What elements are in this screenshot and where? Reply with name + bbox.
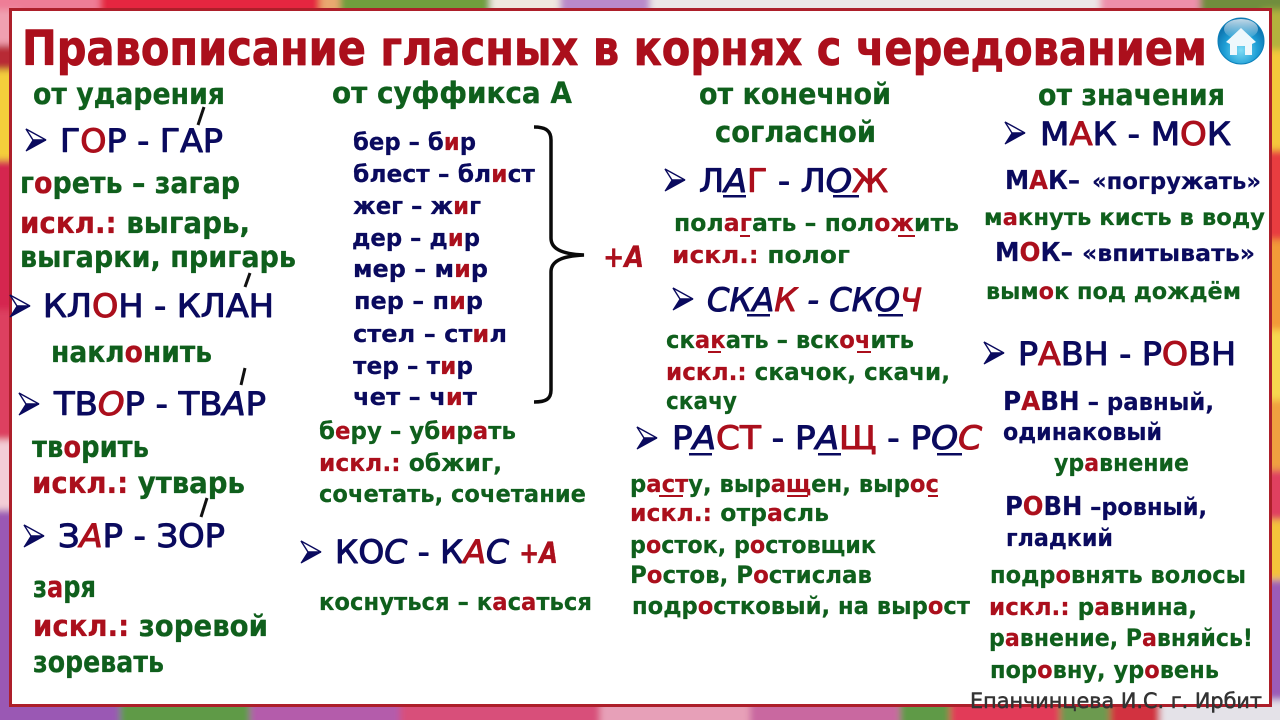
root pair: равн-ровн: РАВН - РОВН [1018, 335, 1236, 373]
exception: утварь: искл.: утварь [32, 466, 245, 500]
icon: bullet arrow [984, 342, 1004, 364]
stress mark [201, 498, 207, 517]
root list: мер – мир [353, 255, 488, 283]
panel: от конечной согласной [630, 77, 983, 620]
example: выгарки, пригарь: выгарки, пригарь [20, 240, 296, 274]
meaning: мак погружать: МАК– [1005, 166, 1080, 196]
example: расту, выращен, вырос: расту, выращен, вырос [630, 470, 939, 498]
example: уравнение: уравнение [1054, 449, 1189, 477]
heading: от конечной согласной: от конечной [699, 77, 891, 111]
example: Ростов, Ростислав: Ростов, Ростислав [630, 561, 872, 589]
root list: чет – чит [353, 383, 477, 411]
root pair: лаг-лож: ЛАГ - ЛОЖ [699, 162, 888, 200]
example: коснуться-касаться: коснуться – касаться [319, 588, 592, 616]
root pair: кос-кас: КОС - КАС [335, 533, 510, 571]
root list: бер – бир [353, 128, 476, 156]
meaning: мок впитывать: «впитывать» [1082, 241, 1255, 267]
root list: пер – пир [354, 287, 483, 315]
icon: bullet arrow [10, 295, 30, 317]
icon: home button [1218, 18, 1264, 64]
exception: выгарь: искл.: выгарь, [20, 206, 250, 240]
icon: bullet arrow [26, 129, 46, 151]
root pair: мак-мок: МАК - МОК [1040, 115, 1231, 153]
example: полагать-положить: полагать – положить [674, 209, 959, 237]
icon: bullet arrow [673, 288, 693, 310]
example: гореть: гореть – загар [20, 166, 240, 200]
icon: bullet arrow [19, 393, 39, 415]
example: скакать-вскочить: скакать – вскочить [666, 326, 914, 354]
example: сочетать, сочетание: сочетать, сочетание [319, 480, 586, 508]
meaning: равн равный: РАВН – равный, [1003, 387, 1214, 417]
example: макнуть кисть в воду: макнуть кисть в воду [984, 205, 1265, 231]
icon: bullet arrow [665, 169, 685, 191]
root list: жег – жиг [353, 192, 481, 220]
panel: от ударения [10, 77, 296, 679]
meaning: мак погружать [1005, 166, 1261, 196]
heading: от ударения: от ударения [33, 77, 225, 111]
exception: равнение, равняйсь: равнение, Равняйсь! [989, 624, 1253, 652]
root pair: гор-гар: ГОР - ГАР [60, 122, 223, 160]
heading: от конечной согласной: согласной [715, 115, 876, 149]
plus A label: +А [519, 536, 558, 570]
example: вымок под дождём: вымок под дождём [986, 279, 1241, 305]
example: заря: заря [33, 570, 96, 604]
stress mark [241, 368, 245, 385]
root pair: твор-твар: ТВОР - ТВАР [53, 385, 266, 423]
stress mark [198, 107, 204, 125]
example: подростковый, на вырост: подростковый, на вырост [632, 592, 970, 620]
icon: bullet arrow [1005, 122, 1025, 144]
example: беру-убирать: беру – убирать [319, 417, 516, 445]
example: творить: творить [32, 430, 149, 464]
exception: полог: искл.: полог [672, 241, 850, 269]
root pair: клон-клан: КЛОН - КЛАН [43, 287, 274, 325]
heading: от суффикса А: от суффикса А [332, 76, 573, 110]
meaning: гладкий: гладкий [1006, 524, 1113, 552]
meaning: ровн ровный: РОВН –ровный, [1005, 492, 1207, 522]
exception: равнина: искл.: равнина, [989, 593, 1197, 621]
icon: bullet arrow [301, 541, 321, 563]
example: наклонить: наклонить [51, 335, 212, 369]
stress mark [245, 273, 250, 287]
icon: bullet arrow [637, 427, 657, 449]
heading: от значения: от значения [1038, 78, 1225, 112]
exception: отрасль: искл.: отрасль [630, 499, 829, 527]
example: зоревать: зоревать [33, 645, 164, 679]
root pair: скак-скоч: СКАК - СКОЧ [707, 281, 922, 319]
meaning: мок впитывать: МОК– [995, 238, 1073, 268]
plus A label: +А [603, 240, 644, 274]
exception: обжиг: искл.: обжиг, [319, 449, 502, 477]
root list: стел – стил [353, 320, 507, 348]
exception: поровну, уровень: поровну, уровень [990, 656, 1219, 684]
root pair: зар-зор: ЗАР - ЗОР [58, 517, 225, 555]
example: подровнять волосы: подровнять волосы [990, 561, 1246, 589]
heading: от конечной согласной [699, 77, 891, 149]
meaning: одинаковый: одинаковый [1003, 418, 1162, 446]
icon: bullet arrow [24, 525, 44, 547]
root list [352, 128, 535, 411]
root triple: раст-ращ-рос: РАСТ - РАЩ - РОС [672, 419, 983, 457]
meaning: мок впитывать [995, 238, 1255, 268]
exception: зоревой: искл.: зоревой [33, 609, 268, 643]
exception: скачок, скачи: искл.: скачок, скачи, [666, 358, 950, 386]
root list: дер – дир [352, 224, 480, 252]
author credit: Епанчинцева И.С. г. Ирбит [970, 689, 1262, 713]
root list: тер – тир [353, 352, 473, 380]
example: росток, ростовщик: росток, ростовщик [630, 531, 876, 559]
example: скачу: скачу [666, 387, 737, 415]
root list: блест – блист [353, 160, 535, 188]
panel: от суффикса А [301, 76, 644, 616]
panel: от значения [984, 78, 1265, 684]
curly brace [534, 127, 584, 402]
meaning: мак погружать: «погружать» [1092, 169, 1261, 195]
